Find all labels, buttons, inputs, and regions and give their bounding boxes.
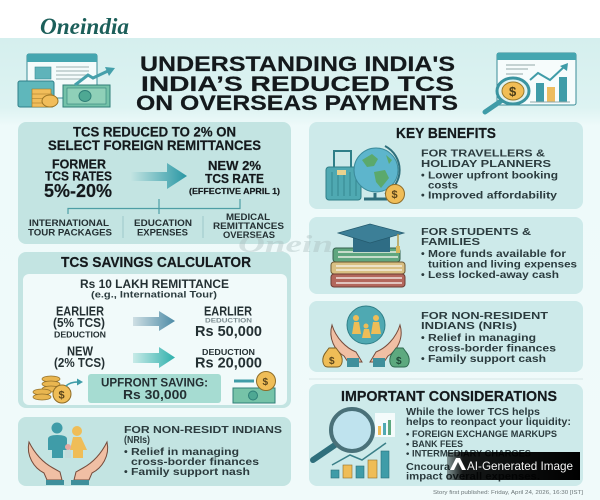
text: travellers benefits: HOLIDAY PLANNERS bbox=[421, 158, 551, 170]
panel: for non-resident Indians, left column bbox=[18, 417, 291, 486]
category: international tour packages: TOUR PACKAGES bbox=[28, 228, 112, 238]
icon: hands, family globe and money bags: $ bbox=[329, 356, 335, 367]
publication note: Story first published: Friday, April 24, 2026, 16:30 [IST] bbox=[433, 490, 584, 496]
earlier 5% TCS label: DEDUCTION bbox=[54, 330, 106, 340]
icon: browser window with money and growth arrow bbox=[18, 54, 115, 107]
icon: graduation cap on books bbox=[331, 224, 405, 287]
title bbox=[136, 53, 458, 115]
text: NRI benefits: Family support cash bbox=[428, 353, 546, 365]
text: considerations: • bbox=[406, 429, 410, 440]
new deduction value bbox=[195, 347, 262, 372]
text: students benefits: More funds available for bbox=[428, 248, 566, 260]
arrow: new bbox=[133, 347, 175, 368]
earlier deduction value: EARLIER bbox=[204, 304, 252, 318]
icon: hands holding family bbox=[28, 422, 108, 485]
text: considerations: impact overall expenses. bbox=[406, 470, 540, 482]
text: travellers benefits: Improved affordability bbox=[428, 190, 557, 202]
text: NRI benefits: (NRIs) bbox=[124, 434, 150, 446]
earlier 5% TCS label bbox=[53, 304, 106, 340]
panel: students and families bbox=[309, 217, 583, 294]
text: NRI benefits: • bbox=[421, 353, 425, 365]
icon: cash with coin bbox=[233, 372, 276, 403]
upfront saving callout bbox=[88, 374, 221, 403]
title: INDIA’S REDUCED TCS bbox=[141, 73, 454, 96]
earlier deduction value: DEDUCTION bbox=[205, 318, 252, 324]
panel heading: KEY BENEFITS bbox=[396, 125, 496, 142]
new TCS rate: TCS RATE bbox=[205, 171, 264, 186]
earlier deduction value bbox=[195, 304, 262, 340]
text: travellers benefits: costs bbox=[428, 180, 458, 192]
text: travellers benefits bbox=[421, 148, 558, 202]
text: considerations: INTERMEDIARY CHARGES bbox=[412, 448, 531, 460]
text: travellers benefits: • bbox=[421, 170, 425, 182]
text: travellers benefits: • bbox=[421, 190, 425, 202]
former TCS rates bbox=[44, 156, 112, 201]
remittance amount bbox=[80, 277, 229, 300]
text: students benefits: • bbox=[421, 248, 425, 260]
icon: chart window with magnifier: $ bbox=[509, 84, 517, 99]
earlier deduction value: Rs 50,000 bbox=[195, 324, 262, 340]
category: international tour packages bbox=[28, 218, 112, 238]
text: students benefits: FOR STUDENTS & bbox=[421, 226, 531, 238]
watermark: Onein bbox=[238, 232, 333, 258]
panel: key benefits, travellers bbox=[309, 122, 583, 209]
icon: cash with coin: $ bbox=[262, 377, 268, 388]
category: education expenses: EXPENSES bbox=[137, 228, 188, 238]
text: considerations bbox=[406, 406, 571, 482]
text: considerations: FOREIGN EXCHANGE MARKUPS bbox=[412, 429, 557, 440]
upfront saving callout: UPFRONT SAVING: bbox=[101, 376, 208, 390]
arrow: former to new rate bbox=[130, 163, 187, 189]
text: considerations: • bbox=[406, 439, 410, 450]
remittance amount: (e.g., International Tour) bbox=[91, 290, 217, 300]
icon: hands, family globe and money bags bbox=[323, 306, 409, 367]
text: NRI benefits: FOR NON-RESIDT INDIANS bbox=[124, 424, 282, 436]
icon: coin stack with arrow: $ bbox=[58, 390, 65, 402]
category: medical remittances overseas: REMITTANCES bbox=[213, 221, 284, 231]
new TCS rate bbox=[189, 158, 280, 196]
text: NRI benefits bbox=[124, 424, 282, 478]
title: ON OVERSEAS PAYMENTS bbox=[136, 92, 458, 115]
text: NRI benefits: • bbox=[124, 466, 128, 478]
new TCS rate: NEW 2% bbox=[208, 158, 261, 173]
panel: important considerations bbox=[309, 384, 583, 486]
category: education expenses: EDUCATION bbox=[134, 218, 192, 228]
new TCS rate: (EFFECTIVE APRIL 1) bbox=[189, 186, 280, 196]
text: NRI benefits: Relief in managing bbox=[428, 332, 536, 344]
earlier 5% TCS label: (5% TCS) bbox=[53, 316, 105, 330]
text: considerations: Cncoura bbox=[406, 461, 450, 473]
text: considerations: While the lower TCS helps bbox=[406, 406, 540, 418]
category: medical remittances overseas: MEDICAL bbox=[226, 212, 271, 222]
badge: AI-generated image bbox=[447, 452, 580, 480]
text: NRI benefits: FOR NON-RESIDENT bbox=[421, 310, 549, 322]
panel heading: IMPORTANT CONSIDERATIONS bbox=[341, 388, 557, 405]
text: travellers benefits: FOR TRAVELLERS & bbox=[421, 148, 545, 160]
former TCS rates: FORMER bbox=[52, 156, 107, 172]
title: UNDERSTANDING INDIA'S bbox=[140, 53, 455, 76]
text: students benefits: • bbox=[421, 269, 425, 281]
text: considerations: helps to reonpact your liquidity: bbox=[406, 416, 571, 428]
badge: AI-generated image: AI-Generated Image bbox=[467, 459, 573, 473]
category: international tour packages: INTERNATIONAL bbox=[29, 218, 110, 228]
category: education expenses bbox=[134, 218, 192, 238]
icon: coin stack with arrow bbox=[33, 376, 83, 403]
arrow: earlier bbox=[133, 311, 175, 331]
category: medical remittances overseas: OVERSEAS bbox=[223, 230, 275, 240]
icon: magnifier over growth chart bbox=[313, 409, 395, 478]
new deduction value: Rs 20,000 bbox=[195, 356, 262, 372]
earlier 5% TCS label: EARLIER bbox=[56, 304, 104, 318]
text: considerations: • bbox=[406, 448, 410, 460]
text: NRI benefits bbox=[421, 310, 556, 365]
icon: chart window with magnifier bbox=[485, 53, 576, 112]
remittance amount: Rs 10 LAKH REMITTANCE bbox=[80, 277, 229, 291]
text: travellers benefits: Lower upfront booking bbox=[428, 170, 558, 182]
panel heading: TCS SAVINGS CALCULATOR bbox=[61, 254, 251, 271]
text: NRI benefits: cross-border finances bbox=[131, 456, 259, 468]
former TCS rates: 5%-20% bbox=[44, 181, 112, 201]
panel: non-resident Indians, right column bbox=[309, 301, 583, 372]
text: NRI benefits: cross-border finances bbox=[428, 342, 556, 354]
new deduction value: DEDUCTION bbox=[202, 347, 255, 357]
new 2% TCS label: NEW bbox=[67, 344, 93, 358]
category: medical remittances overseas bbox=[213, 212, 284, 240]
logo: Oneindia: Oneindia bbox=[40, 14, 129, 39]
panel heading: SELECT FOREIGN REMITTANCES bbox=[48, 137, 261, 153]
icon: suitcase, globe and coin: $ bbox=[392, 189, 398, 201]
panel: TCS reduced to 2% bbox=[18, 122, 291, 244]
text: students benefits bbox=[421, 226, 577, 281]
text: students benefits: FAMILIES bbox=[421, 236, 480, 248]
former TCS rates: TCS RATES bbox=[45, 168, 112, 184]
bracket connecting categories bbox=[68, 199, 240, 214]
text: NRI benefits: Relief in managing bbox=[131, 446, 239, 458]
text: NRI benefits: Family support nash bbox=[131, 466, 250, 478]
text: students benefits: Less locked-away cash bbox=[428, 269, 559, 281]
new 2% TCS label bbox=[54, 344, 105, 370]
text: students benefits: tuition and living expenses bbox=[428, 258, 577, 270]
panel: TCS savings calculator bbox=[18, 252, 291, 408]
upfront saving callout: Rs 30,000 bbox=[123, 387, 187, 402]
panel heading: TCS REDUCED TO 2% ON bbox=[73, 124, 236, 140]
text: considerations: BANK FEES bbox=[412, 439, 463, 450]
text: NRI benefits: • bbox=[124, 446, 128, 458]
icon: hands, family globe and money bags: $ bbox=[396, 356, 402, 367]
new 2% TCS label: (2% TCS) bbox=[54, 356, 105, 370]
text: NRI benefits: INDIANS (NRIs) bbox=[421, 320, 517, 332]
panel heading bbox=[48, 124, 261, 153]
icon: suitcase, globe and coin bbox=[326, 146, 404, 204]
text: NRI benefits: • bbox=[421, 332, 425, 344]
